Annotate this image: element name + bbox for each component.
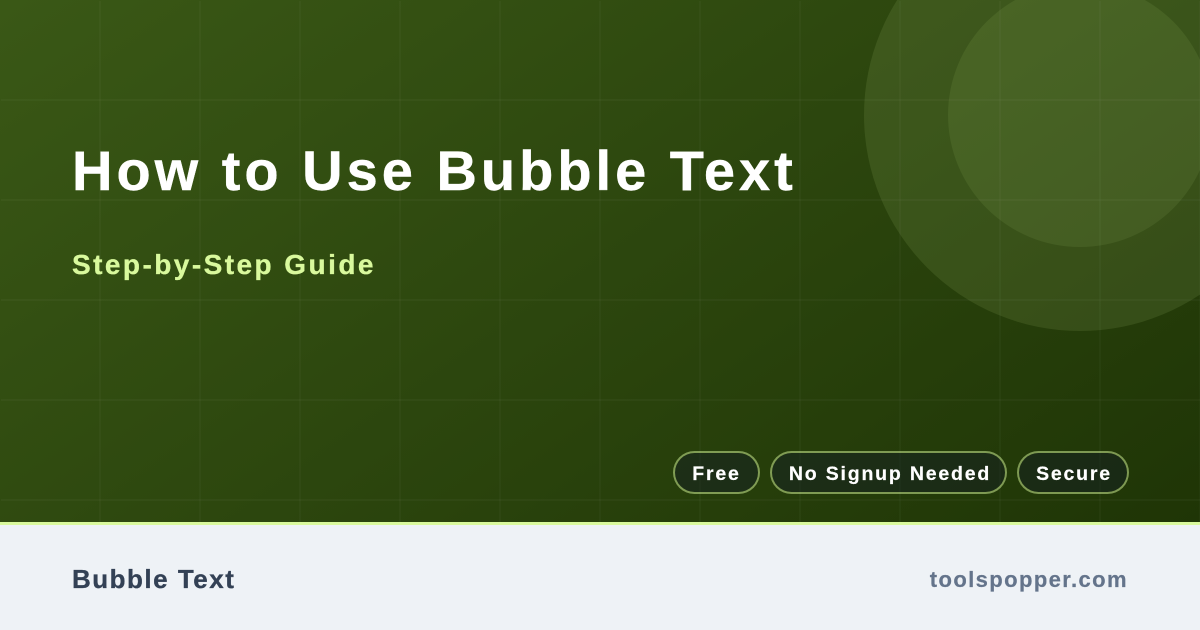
badge: No Signup Needed: No Signup Needed	[789, 463, 991, 485]
badge: No Signup Needed	[770, 451, 1007, 494]
decorative small circle	[948, 0, 1200, 247]
decorative large circle	[864, 0, 1200, 331]
footer domain: toolspopper.com	[930, 567, 1128, 592]
badge: Secure: Secure	[1036, 463, 1112, 485]
title: How to Use Bubble Text	[72, 139, 797, 202]
subtitle: Step-by-Step Guide	[72, 249, 376, 280]
panel: footer bar	[0, 525, 1200, 630]
badge: Free: Free	[692, 463, 741, 485]
badge: Free	[673, 451, 760, 494]
badge: Secure	[1017, 451, 1129, 494]
footer brand name: Bubble Text	[72, 564, 235, 594]
